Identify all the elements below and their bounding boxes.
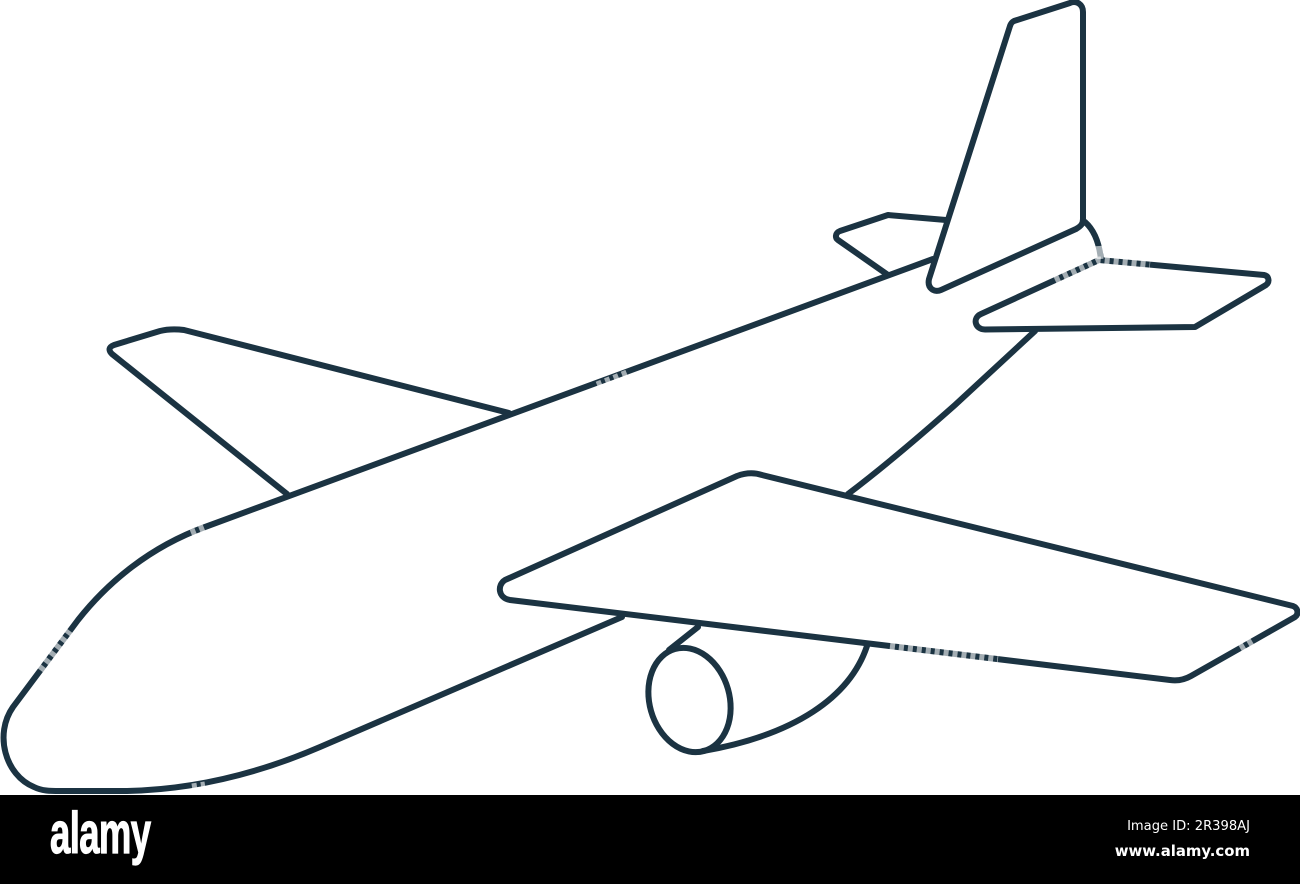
image id and site	[1115, 819, 1250, 860]
engine	[636, 627, 867, 762]
near wing	[500, 473, 1297, 680]
footer bar	[0, 795, 1300, 884]
fuselage upper edge and nose	[4, 259, 933, 791]
far wing	[110, 329, 509, 494]
watermark traces across the lines	[40, 246, 1252, 787]
vertical tail fin	[929, 2, 1083, 291]
far tailplane	[836, 215, 946, 275]
watermark logo: alamy	[50, 800, 150, 866]
tail cone	[1085, 222, 1101, 260]
near tailplane	[976, 260, 1268, 330]
image id and site: www.alamy.com	[1115, 842, 1250, 860]
image id and site: Image ID: 2R398AJ	[1127, 819, 1250, 834]
fuselage lower rear edge	[848, 331, 1035, 494]
